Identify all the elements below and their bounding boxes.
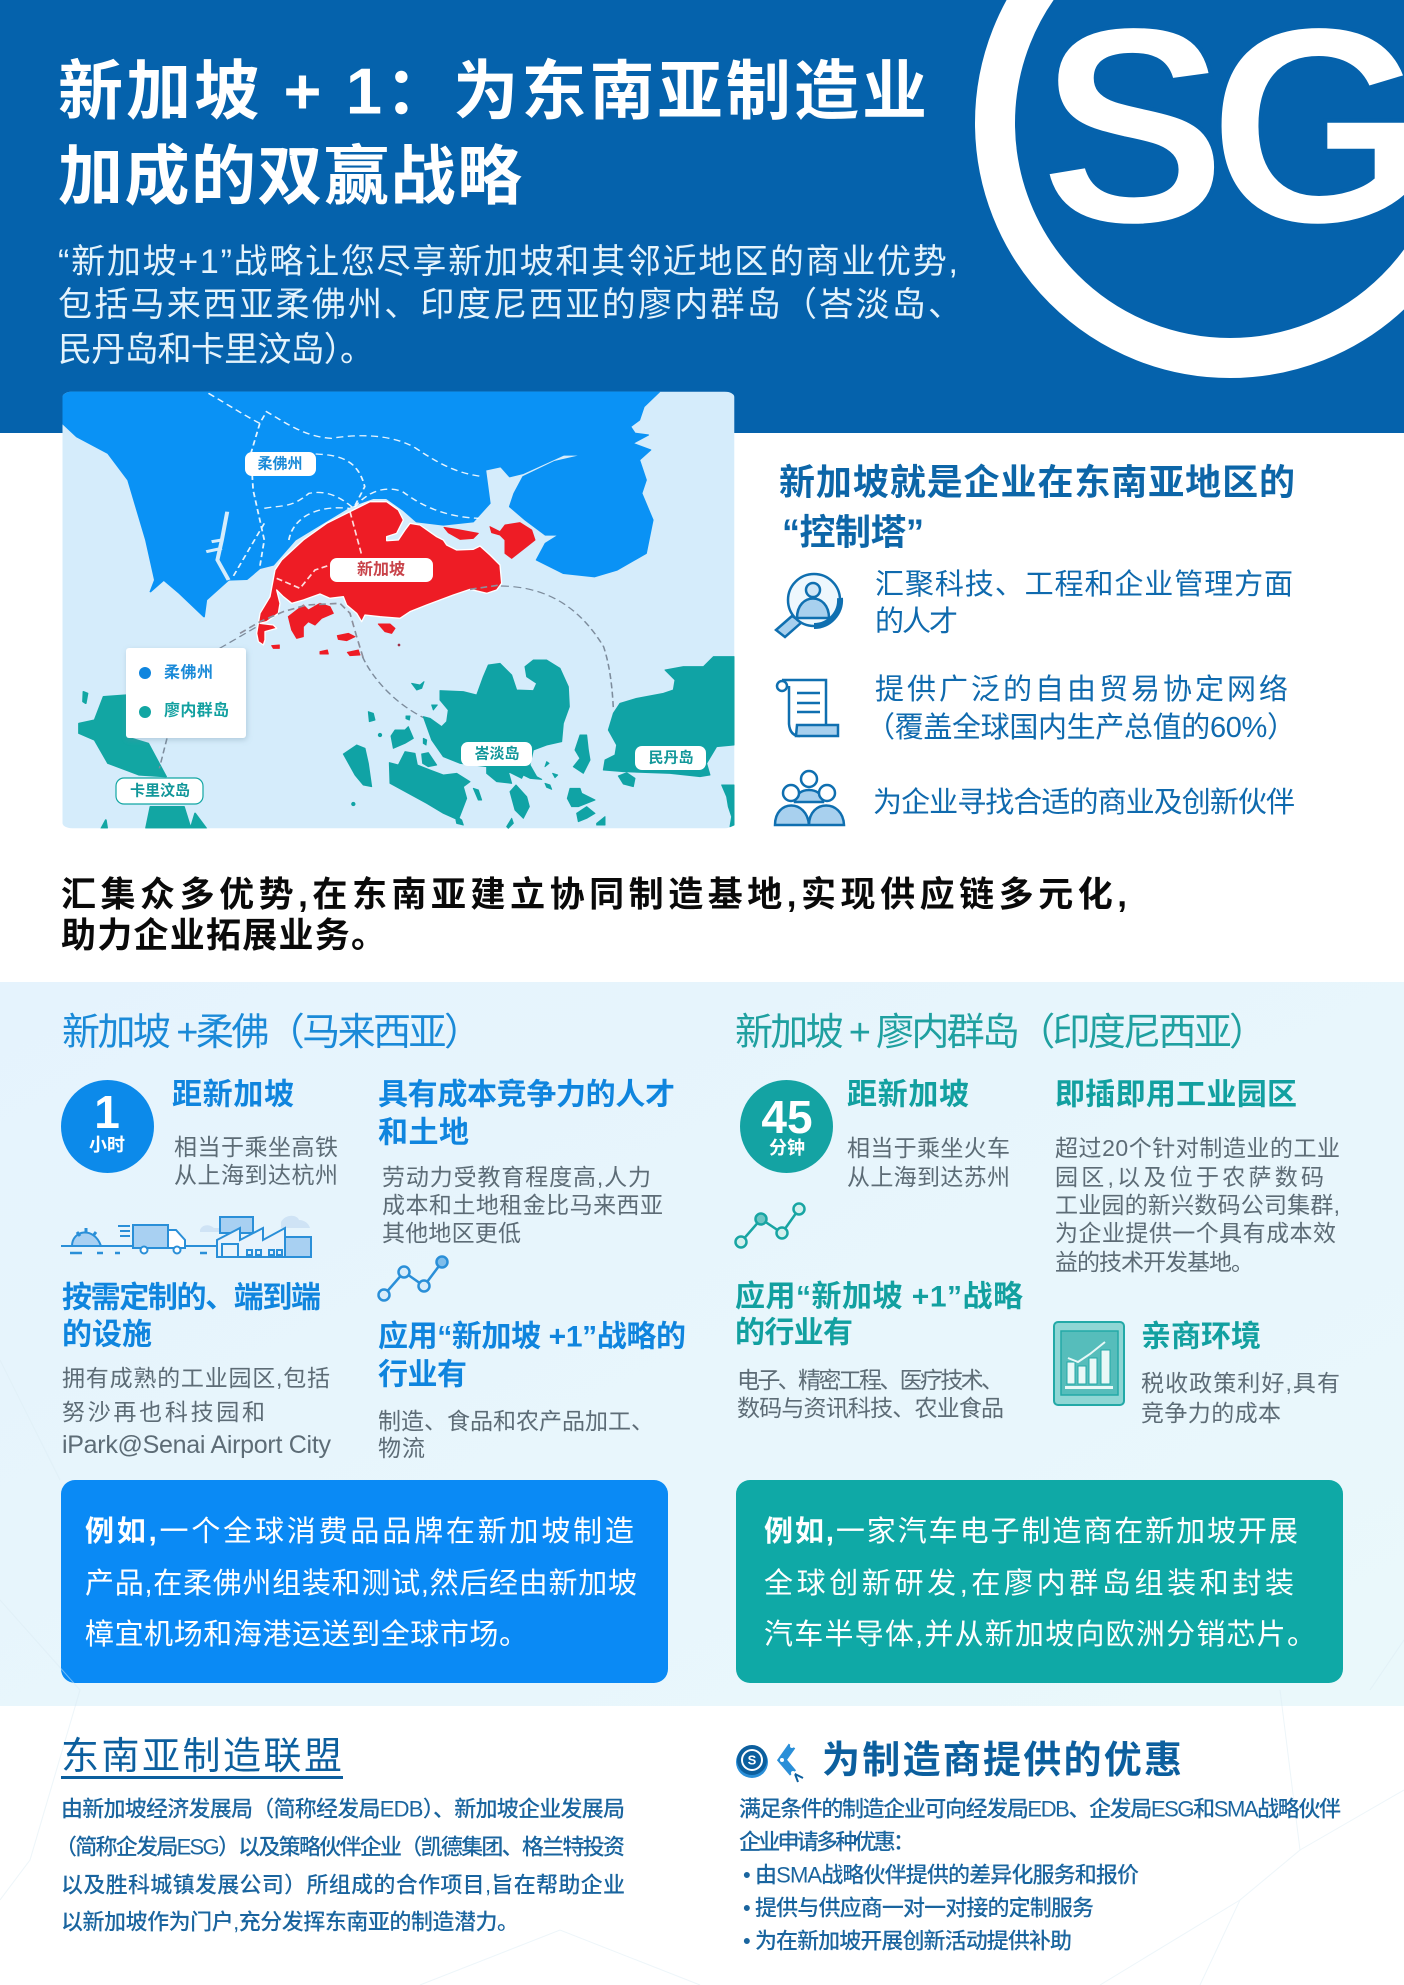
badge: 1 hour: 1 (94, 1086, 120, 1138)
text: benefits list: 企业申请多种优惠： (739, 1830, 915, 1854)
icon: coin and robot arm: S (748, 1752, 757, 1768)
custom facilities: iPark@Senai Airport City (62, 1431, 332, 1459)
custom facilities: 拥有成熟的工业园区,包括 (62, 1365, 330, 1391)
heading: control tower: “控制塔” (782, 512, 924, 552)
talent and land cost: 其他地区更低 (382, 1220, 521, 1246)
title (58, 54, 927, 212)
map legend (126, 648, 246, 738)
text: alliance description (55, 1796, 625, 1934)
distance text (172, 1078, 338, 1188)
icon: magnifier person (776, 574, 840, 637)
text: talent (875, 568, 1293, 638)
callout: Johor example (61, 1480, 668, 1683)
text: trade agreements: 提供广泛的自由贸易协定网络 (875, 673, 1288, 706)
panel: map (62, 392, 734, 828)
callout: Riau example: 全球创新研发,在廖内群岛组装和封装 (764, 1567, 1294, 1600)
icon: truck and factory (61, 1216, 311, 1257)
panel: comparison background (0, 982, 1404, 1706)
applicable industries: 应用“新加坡 +1”战略的 (378, 1320, 686, 1354)
applicable industries: 数码与资讯科技、农业食品 (737, 1395, 1004, 1421)
plug and play parks (1055, 1078, 1340, 1275)
custom facilities: 按需定制的、端到端 (62, 1282, 321, 1314)
text: benefits list: 满足条件的制造企业可向经发局EDB、企发局ESG和SMA战略伙伴 (739, 1796, 1341, 1822)
plug and play parks: 益的技术开发基地。 (1055, 1249, 1254, 1275)
text: alliance description: 以新加坡作为门户,充分发挥东南亚的制造潜力。 (61, 1910, 519, 1934)
applicable industries: 电子、精密工程、医疗技术、 (737, 1367, 1004, 1393)
plug and play parks: 园区,以及位于农萨数码 (1055, 1164, 1324, 1190)
text: benefits list: • 提供与供应商一对一对接的定制服务 (743, 1896, 1094, 1920)
title: 加成的双赢战略 (58, 140, 522, 212)
panel: Singapore + Riau Islands (735, 1012, 1343, 1683)
pro-business environment: 竞争力的成本 (1141, 1400, 1281, 1426)
pro-business environment: 税收政策利好,具有 (1141, 1370, 1340, 1396)
heading: control tower (779, 462, 1295, 552)
talent and land cost: 和土地 (378, 1116, 469, 1150)
distance text (847, 1078, 1010, 1190)
pro-business environment: 亲商环境 (1141, 1320, 1261, 1354)
badge: 45 minutes (740, 1080, 833, 1173)
intro paragraph: 包括马来西亚柔佛州、印度尼西亚的廖内群岛（峇淡岛、 (58, 286, 962, 324)
distance text: 从上海到达苏州 (847, 1164, 1010, 1190)
label: Singapore: 新加坡 (357, 560, 405, 578)
label: Batam: 峇淡岛 (474, 744, 520, 762)
label: Johor: 柔佛州 (257, 456, 303, 472)
icon: scroll (777, 680, 838, 736)
text: talent: 汇聚科技、工程和企业管理方面 (875, 568, 1293, 601)
applicable industries: 应用“新加坡 +1”战略 (735, 1280, 1023, 1314)
icon: people (775, 771, 844, 825)
heading: alliance: 东南亚制造联盟 (61, 1736, 342, 1778)
distance text: 相当于乘坐火车 (847, 1135, 1010, 1161)
text: alliance description: 以及胜科城镇发展公司）所组成的合作项目,旨在帮助企业 (61, 1872, 625, 1898)
callout: Johor example: 产品,在柔佛州组装和测试,然后经由新加坡 (85, 1567, 637, 1600)
callout: Riau example: 例如,一家汽车电子制造商在新加坡开展 (764, 1515, 1298, 1548)
text: trade agreements: （覆盖全球国内生产总值的60%） (866, 711, 1296, 744)
map legend: 廖内群岛 (164, 700, 229, 720)
label: Bintan: 民丹岛 (648, 748, 694, 766)
applicable industries: 的行业有 (735, 1316, 853, 1350)
callout: Johor example: 例如,一个全球消费品品牌在新加坡制造 (85, 1515, 634, 1548)
talent and land cost: 具有成本竞争力的人才 (378, 1078, 675, 1112)
talent and land cost: 成本和土地租金比马来西亚 (382, 1192, 663, 1218)
header banner (0, 0, 1404, 433)
plug and play parks: 为企业提供一个具有成本效 (1055, 1220, 1336, 1246)
panel: manufacturer benefits (736, 1740, 1341, 1954)
text: alliance description: 由新加坡经济发展局（简称经发局EDB）、新加坡企业发展局 (61, 1796, 625, 1822)
label: Karimun (116, 778, 203, 804)
callout: Johor example: 樟宜机场和海港运送到全球市场。 (85, 1618, 528, 1651)
map legend: 柔佛州 (164, 664, 213, 682)
distance text: 距新加坡 (172, 1078, 294, 1112)
panel: Singapore + Johor (61, 1012, 686, 1683)
title: 新加坡 + 1：为东南亚制造业 (58, 54, 927, 128)
applicable industries: 行业有 (378, 1358, 467, 1392)
panel: SE Asia manufacturing alliance (55, 1736, 625, 1934)
plug and play parks: 超过20个针对制造业的工业 (1055, 1135, 1340, 1161)
icon: tablet bar chart (1054, 1322, 1124, 1405)
heading: Riau: 新加坡 + 廖内群岛（印度尼西亚） (735, 1012, 1267, 1054)
badge: 1 hour (61, 1080, 154, 1173)
distance text: 距新加坡 (847, 1078, 969, 1112)
Riau islands (343, 657, 734, 828)
label: Singapore (330, 558, 433, 582)
heading: control tower: 新加坡就是企业在东南亚地区的 (779, 462, 1295, 502)
text: alliance description: （简称企发局ESG）以及策略伙伴企业（凯德集团、格兰特投资 (55, 1834, 625, 1860)
text: trade agreements (866, 673, 1296, 744)
intro paragraph: “新加坡+1”战略让您尽享新加坡和其邻近地区的商业优势, (58, 243, 958, 281)
callout: Riau example: 汽车半导体,并从新加坡向欧洲分销芯片。 (764, 1618, 1316, 1651)
bold summary statement (61, 876, 1127, 956)
SG logo (995, 0, 1404, 358)
text: benefits list (739, 1796, 1341, 1954)
text: benefits list: • 由SMA战略伙伴提供的差异化服务和报价 (743, 1862, 1139, 1888)
talent and land cost (378, 1078, 675, 1246)
applicable industries: 物流 (378, 1435, 425, 1461)
custom facilities: 的设施 (62, 1318, 152, 1352)
badge: 45 minutes: 分钟 (769, 1138, 805, 1158)
Singapore landmass (240, 502, 535, 658)
label: Batam (461, 742, 532, 766)
icon: line chart (736, 1204, 804, 1248)
icon: coin and robot arm (736, 1744, 803, 1782)
text: talent: 的人才 (875, 605, 958, 638)
plug and play parks: 工业园的新兴数码公司集群, (1055, 1192, 1340, 1218)
distance text: 相当于乘坐高铁 (174, 1134, 338, 1160)
badge: 1 hour: 小时 (89, 1135, 125, 1155)
badge: 45 minutes: 45 (761, 1091, 813, 1143)
text: benefits list: • 为在新加坡开展创新活动提供补助 (743, 1928, 1072, 1954)
label: Johor (245, 452, 316, 476)
bold summary statement: 助力企业拓展业务。 (61, 916, 386, 956)
label: Bintan (635, 746, 706, 770)
intro paragraph: 民丹岛和卡里汶岛）。 (58, 331, 374, 369)
custom facilities: 努沙再也科技园和 (62, 1399, 265, 1425)
panel: control tower (775, 462, 1296, 825)
applicable industries (735, 1280, 1023, 1421)
talent and land cost: 劳动力受教育程度高,人力 (382, 1164, 651, 1190)
heading: Johor: 新加坡 +柔佛（马来西亚） (62, 1012, 482, 1054)
icon: line chart (378, 1256, 448, 1300)
custom facilities (62, 1282, 332, 1459)
applicable industries: 制造、食品和农产品加工、 (378, 1408, 654, 1434)
heading: benefits: 为制造商提供的优惠 (822, 1740, 1182, 1782)
intro paragraph (58, 243, 962, 369)
callout: Riau example (736, 1480, 1343, 1683)
distance text: 从上海到达杭州 (174, 1162, 338, 1188)
label: Karimun: 卡里汶岛 (130, 782, 190, 800)
bold summary statement: 汇集众多优势,在东南亚建立协同制造基地,实现供应链多元化, (61, 876, 1127, 914)
plug and play parks: 即插即用工业园区 (1055, 1078, 1297, 1112)
text: partners: 为企业寻找合适的商业及创新伙伴 (873, 786, 1295, 819)
pro-business environment (1141, 1320, 1340, 1426)
applicable industries (378, 1320, 686, 1461)
